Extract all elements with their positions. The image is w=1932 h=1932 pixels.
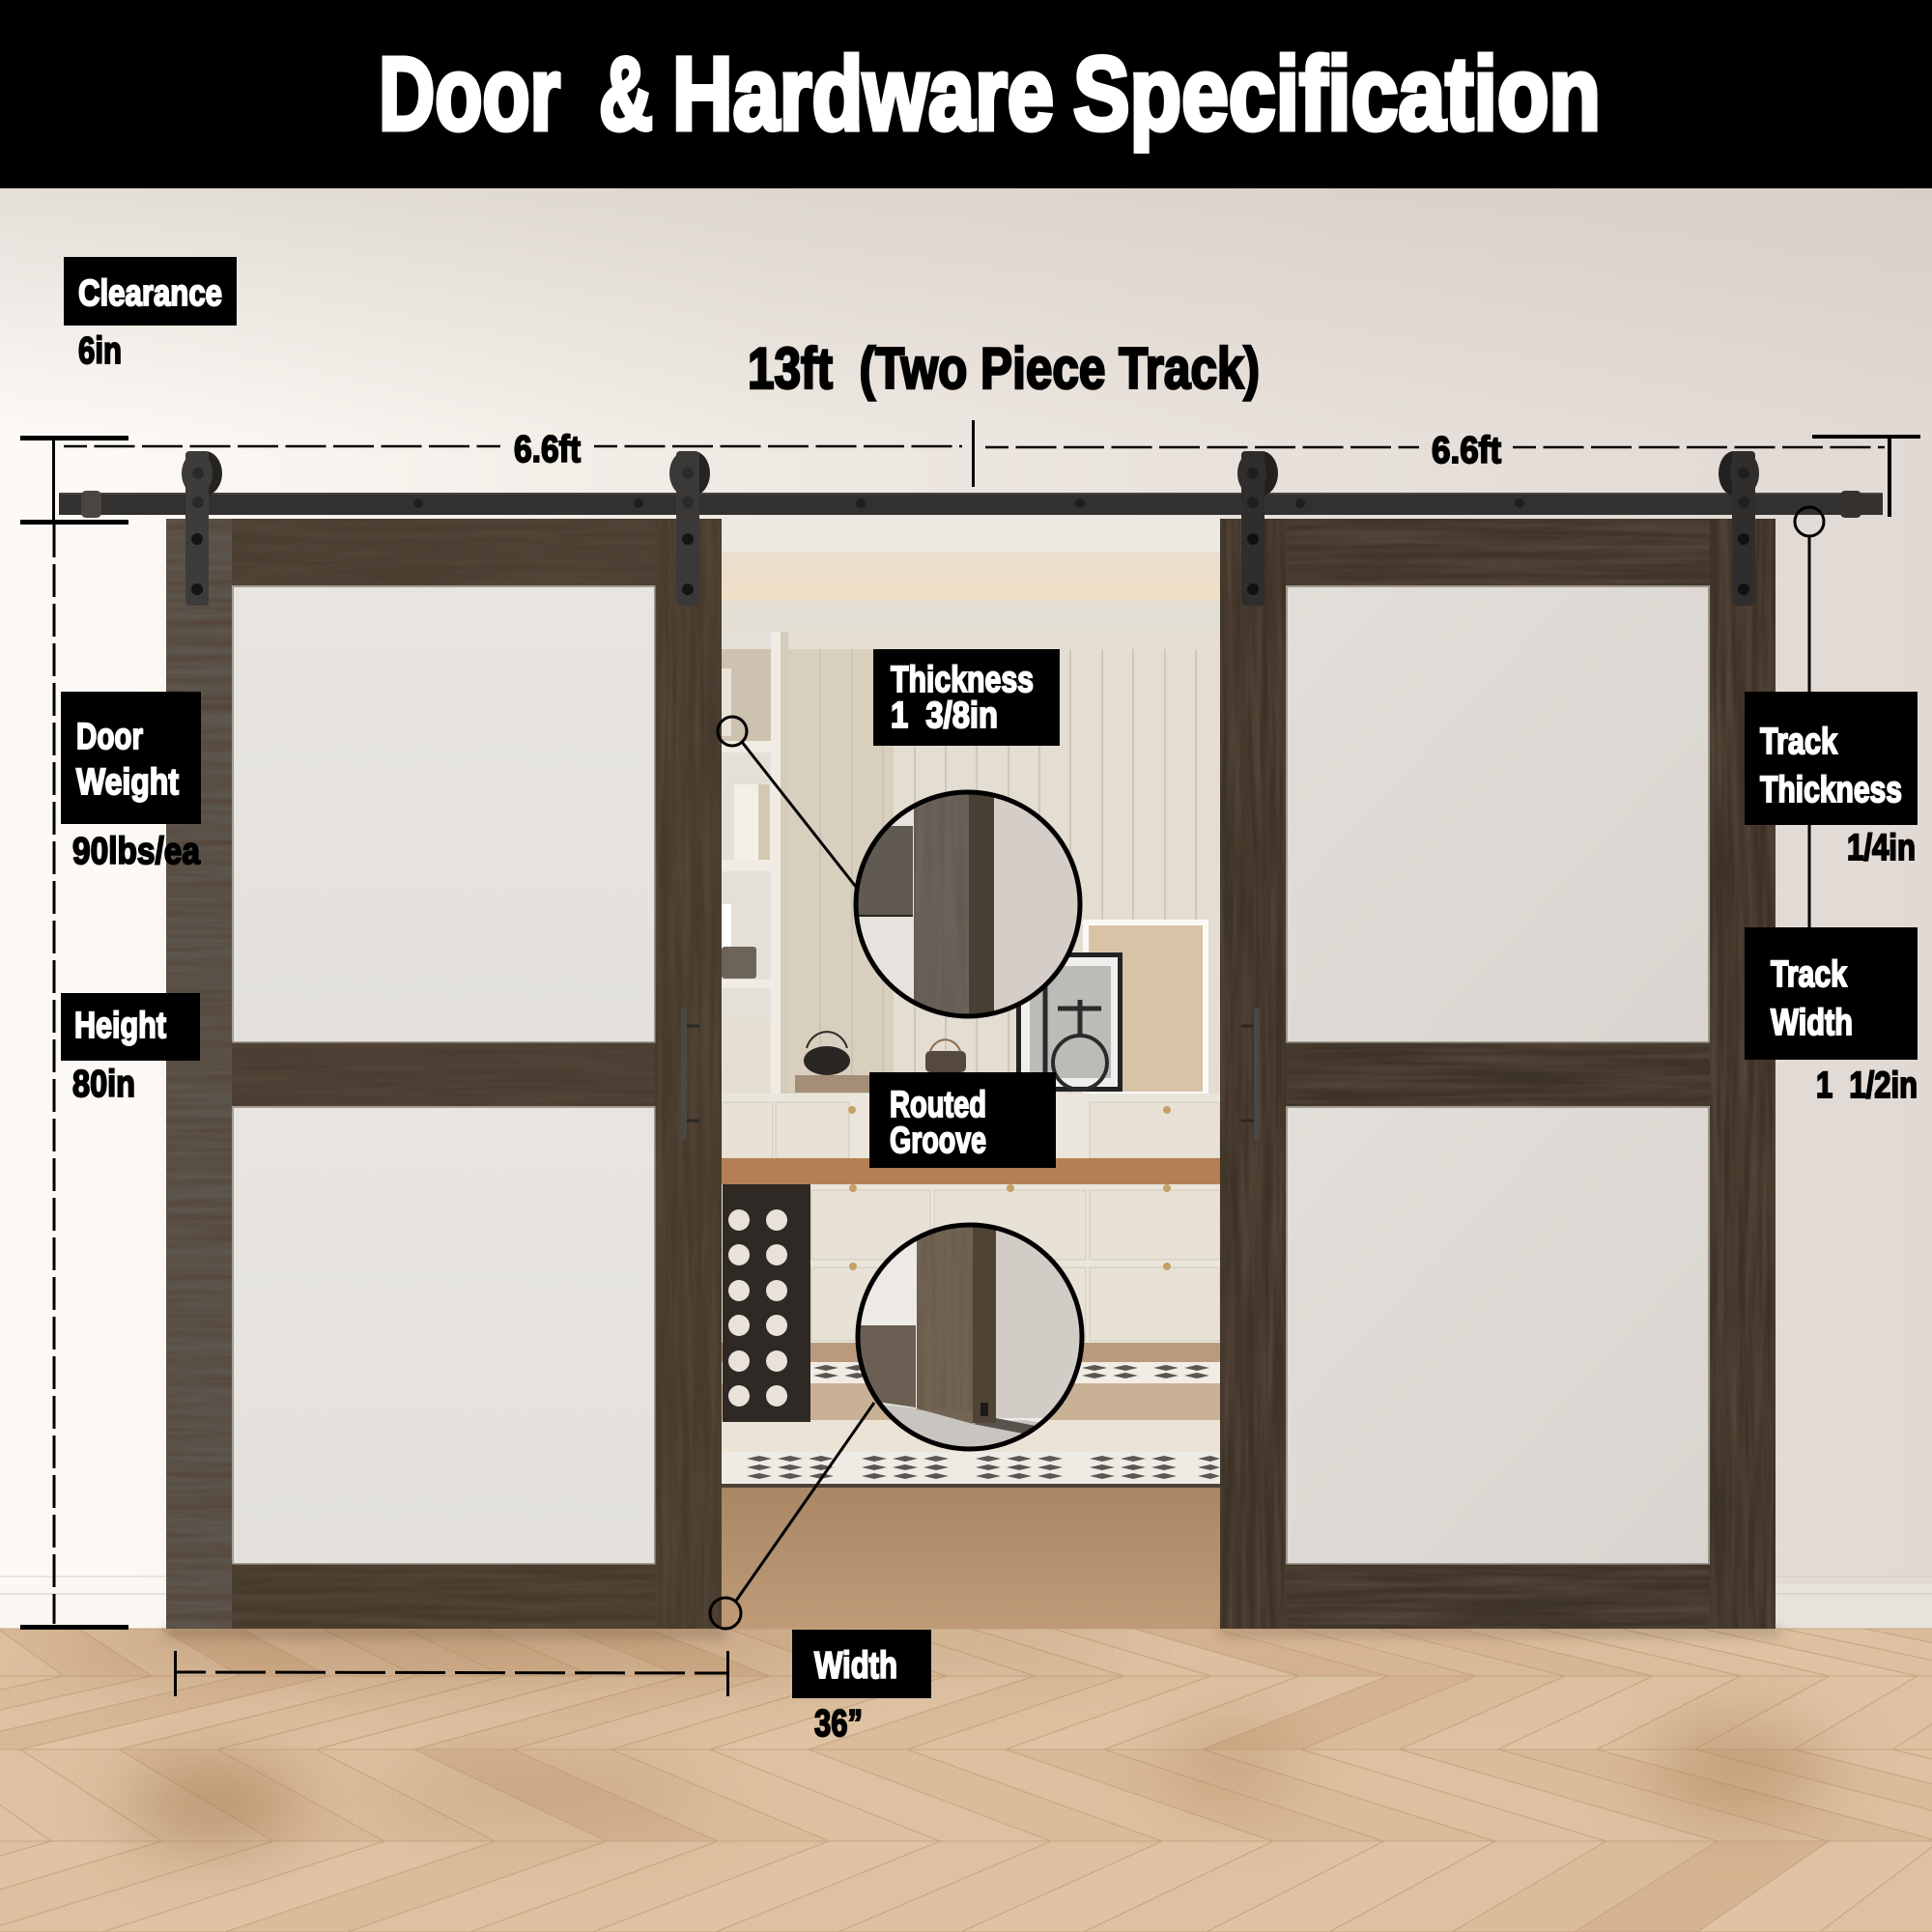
title: Specification: [1073, 35, 1601, 152]
pull handle: [681, 1008, 699, 1140]
track thickness callout: Track: [1760, 722, 1838, 762]
routed groove callout: Routed: [890, 1085, 986, 1125]
width callout: [792, 1630, 931, 1745]
floor shadows: [48, 1609, 1826, 1839]
thickness callout: 1 3/8in: [891, 696, 998, 736]
width callout: 36”: [814, 1703, 863, 1745]
upper frosted panel: [1287, 586, 1709, 1042]
door weight callout: Weight: [76, 762, 179, 803]
height callout: [61, 993, 200, 1105]
track thickness callout: [1745, 692, 1918, 868]
thickness callout: [873, 649, 1060, 746]
door weight callout: 90lbs/ea: [72, 831, 200, 872]
cabinets upper: [722, 1094, 1220, 1159]
far floor and rug: [722, 1343, 1220, 1629]
right barn door: [1220, 519, 1780, 1635]
width pointer line: [736, 1403, 874, 1601]
upper frosted panel: [233, 586, 655, 1042]
sliding track rail: [59, 491, 1883, 518]
left stile: [1220, 519, 1286, 1629]
height dashed dimension line: [20, 525, 128, 1630]
floor row 1 planks: [0, 1629, 1932, 1676]
clearance callout: 6in: [78, 330, 122, 372]
hanger strap 1: [182, 451, 222, 606]
beadboard wall: [722, 630, 1220, 1095]
left stile: [166, 519, 232, 1629]
bottom rail: [232, 1564, 655, 1629]
magnifier: door thickness detail: [850, 782, 1086, 1018]
magnifier: routed groove detail: [856, 1223, 1084, 1451]
white framed art: [1083, 920, 1208, 1094]
middle rail: [1286, 1042, 1710, 1106]
thickness target ring: [718, 717, 747, 746]
interior room seen between doors: [722, 516, 1220, 1629]
bike photo frame: [1016, 952, 1122, 1092]
thickness pointer line: [742, 742, 856, 887]
floor row 2 planks: [0, 1676, 1932, 1749]
center tick: [972, 420, 975, 487]
title: Door: [379, 35, 560, 152]
track length dimension left 6.6ft: 6.6ft: [514, 429, 581, 470]
routed groove callout: [869, 1072, 1056, 1168]
clearance callout: [64, 257, 237, 372]
track width callout: [1745, 927, 1918, 1106]
middle rail: [232, 1042, 655, 1106]
title: &: [599, 35, 653, 152]
door shadow on floor: [166, 1628, 726, 1636]
door weight callout: [61, 692, 201, 872]
right stile: [1710, 519, 1776, 1629]
clearance dimension bracket right: [1812, 435, 1920, 517]
hanger strap 4: [1719, 451, 1759, 606]
width target ring: [710, 1598, 741, 1629]
track bolts: [413, 498, 1524, 508]
crown molding: [722, 601, 1220, 630]
title: Hardware: [672, 35, 1054, 152]
teapots: [795, 1032, 966, 1093]
top rail: [232, 519, 655, 585]
thickness callout: Thickness: [891, 660, 1034, 700]
title: [379, 35, 1601, 152]
routed groove callout: Groove: [890, 1121, 986, 1161]
left barn door: [166, 519, 726, 1636]
chevron wood floor: [0, 1609, 1932, 1932]
wall background: [0, 188, 1932, 1629]
top rail: [1286, 519, 1710, 585]
lower frosted panel: [233, 1107, 655, 1564]
perforated black stand: [723, 1184, 810, 1422]
track thickness target ring: [1795, 507, 1824, 536]
bookcase: [722, 632, 788, 1095]
height callout: Height: [74, 1006, 166, 1046]
track width callout: Width: [1771, 1003, 1853, 1043]
track stops: [81, 491, 101, 518]
wooden countertop: [722, 1158, 1220, 1184]
height callout: 80in: [72, 1064, 135, 1105]
lower frosted panel: [1287, 1107, 1709, 1564]
track thickness callout: 1/4in: [1847, 828, 1916, 868]
track width callout: Track: [1771, 954, 1848, 995]
width callout: Width: [814, 1645, 897, 1687]
ceiling: [722, 516, 1220, 553]
clearance callout: Clearance: [78, 273, 222, 314]
hanger strap 2: [669, 451, 710, 606]
cabinets lower: [722, 1184, 1220, 1345]
rug diamond pattern: [747, 1365, 1220, 1479]
header band: [0, 0, 1932, 188]
pull handle: [1241, 1008, 1260, 1140]
door weight callout: Door: [76, 717, 143, 757]
floor row 3 planks: [0, 1749, 1932, 1841]
track length heading: 13ft (Two Piece Track): [748, 336, 1260, 401]
track length dimension right 6.6ft: 6.6ft: [1432, 430, 1501, 471]
track thickness connector line: [1808, 536, 1810, 927]
right stile: [655, 519, 722, 1629]
width dashed dimension: [174, 1651, 729, 1696]
floor row 4 planks: [0, 1841, 1932, 1932]
hanger strap 3: [1237, 451, 1278, 606]
bottom rail: [1286, 1564, 1710, 1629]
clearance dimension bracket left: [20, 436, 128, 525]
